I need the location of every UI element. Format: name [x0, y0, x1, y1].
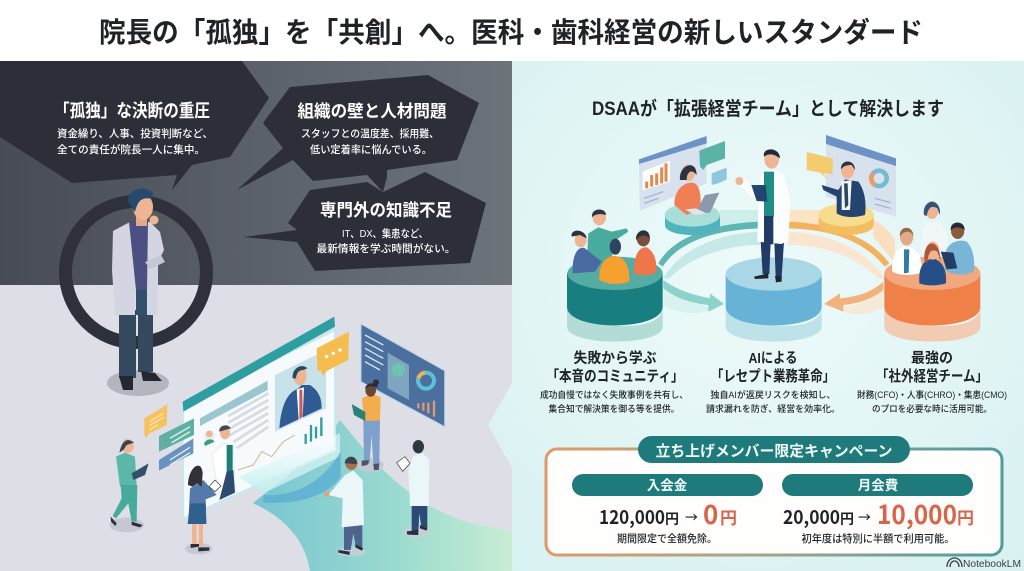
label: monthly fee: 月会費 — [858, 477, 898, 493]
person: woman in orange — [352, 379, 384, 472]
panel: campaign — [546, 436, 1002, 555]
column: AI receipt: 「レセプト業務革命」 — [711, 367, 835, 385]
speech bubble: isolation: 資金繰り、人事、投資判断など、 — [57, 127, 213, 140]
speech bubble: isolation: 全ての責任が院長一人に集中。 — [57, 143, 205, 156]
person: central doctor — [735, 149, 791, 282]
heading: solution: DSAAが「拡張経営チーム」として解決します — [592, 97, 944, 120]
column: community: 集合知で解決策を御る等を提供。 — [548, 403, 680, 414]
diagram: expanded management team — [567, 135, 980, 342]
cylinder: blue centre — [726, 257, 822, 342]
price: monthly fee: 円 — [957, 504, 974, 529]
group: outside management team — [892, 201, 974, 285]
upper arcs — [658, 210, 895, 278]
campaign heading pill: 立ち上げメンバー限定キャンペーン — [656, 443, 892, 460]
column: outside team: 財務(CFO)・人事(CHRO)・集患(CMO) — [857, 389, 1007, 400]
icon: isolation ring — [66, 202, 206, 342]
price: entry fee: 円 — [665, 509, 679, 529]
person: woman with laptop — [674, 164, 719, 215]
main browser window — [183, 317, 335, 518]
person: nurse — [109, 439, 149, 532]
price: monthly fee: 10,000 — [877, 495, 957, 532]
arrow: orange into centre — [824, 282, 883, 314]
small cylinder: yellow — [818, 203, 874, 235]
speech bubble: knowledge: IT、DX、集患など、 — [342, 227, 428, 240]
person: doctor with clipboard — [397, 440, 430, 537]
price: entry fee: 円 — [720, 504, 737, 529]
speech bubble: organization — [237, 75, 479, 192]
price: entry fee: → — [685, 507, 698, 526]
projected light beam — [238, 433, 340, 493]
speech bubble: knowledge: 専門外の知識不足 — [320, 201, 452, 220]
column: community: 「本音のコミュニティ」 — [546, 368, 684, 385]
cylinder: teal community — [567, 257, 663, 342]
person: doctor from behind — [324, 457, 366, 557]
speech bubble: organization: スタッフとの温度差、採用難、 — [301, 127, 439, 140]
label: entry fee: 入会金 — [647, 477, 688, 493]
column: outside team: 最強の — [911, 350, 953, 367]
speech bubble: isolation: 「孤独」な決断の重圧 — [54, 101, 210, 121]
column: outside team: のプロを必要な時に活用可能。 — [872, 403, 992, 414]
figure: lonely doctor — [107, 189, 169, 396]
person: window doctor — [204, 425, 235, 500]
column: AI receipt: 請求漏れを防ぎ、経営を効率化。 — [706, 403, 840, 414]
note: monthly fee: 初年度は特別に半額で利用可能。 — [802, 532, 954, 545]
speech bubble: isolation — [0, 61, 269, 190]
column: AI receipt — [706, 350, 840, 414]
chat bubble: yellow dots — [317, 332, 349, 376]
background: title band — [0, 0, 1024, 61]
group: community members — [572, 209, 656, 284]
label: entry fee — [572, 474, 763, 496]
price: monthly fee: → — [858, 507, 871, 526]
speech bubble: knowledge: 最新情報を学ぶ時間がない。 — [316, 242, 456, 255]
campaign heading pill — [638, 436, 910, 463]
chat bubble: small yellow note — [144, 404, 167, 438]
chat bubble: green card — [159, 418, 194, 452]
person: consultant in suit — [822, 161, 866, 217]
price: entry fee: 120,000 — [599, 503, 665, 530]
column: community: 成功自慢ではなく失敗事例を共有し、 — [540, 389, 688, 400]
panel: left floor — [0, 285, 512, 571]
speech bubble: knowledge — [243, 172, 486, 271]
title: 院長の「孤独」を「共創」へ。医科・歯科経営の新しいスタンダード — [99, 16, 923, 48]
scene: online platform illustration — [109, 317, 445, 557]
screen: left presentation — [639, 136, 727, 211]
floor light swoosh — [253, 420, 512, 571]
cylinder: orange team — [884, 257, 980, 342]
price: monthly fee: 20,000 — [783, 503, 840, 530]
column: outside team: 「社外経営チーム」 — [876, 367, 988, 385]
column: community: 失敗から学ぶ — [574, 349, 657, 367]
watermark: NotebookLM: NotebookLM — [963, 558, 1021, 570]
speech bubble: organization: 組織の壁と人材問題 — [298, 102, 446, 121]
chat bubble: blue card — [159, 438, 193, 471]
note: entry fee: 期間限定で全額免除。 — [617, 532, 717, 545]
arrow: teal into centre — [663, 280, 724, 313]
price: monthly fee: 円 — [840, 509, 854, 529]
speech bubble: organization: 低い定着率に悩んでいる。 — [310, 143, 432, 156]
column: AI receipt: AIによる — [748, 350, 798, 367]
price: entry fee — [599, 495, 737, 532]
column: outside team — [857, 350, 1007, 414]
panel: left dark wall — [0, 61, 512, 285]
panel: right solution background — [488, 61, 1024, 571]
icon: data dashboard screen — [361, 324, 445, 427]
label: monthly fee — [782, 474, 973, 496]
column: AI receipt: 独自AIが返戻リスクを検知し、 — [710, 389, 836, 400]
person: woman with clipboard — [185, 466, 221, 554]
screen: right presentation — [807, 135, 896, 217]
column: community — [540, 349, 688, 414]
price: monthly fee — [783, 495, 974, 532]
price: entry fee: 0 — [703, 495, 718, 532]
small cylinder: teal — [665, 203, 720, 235]
